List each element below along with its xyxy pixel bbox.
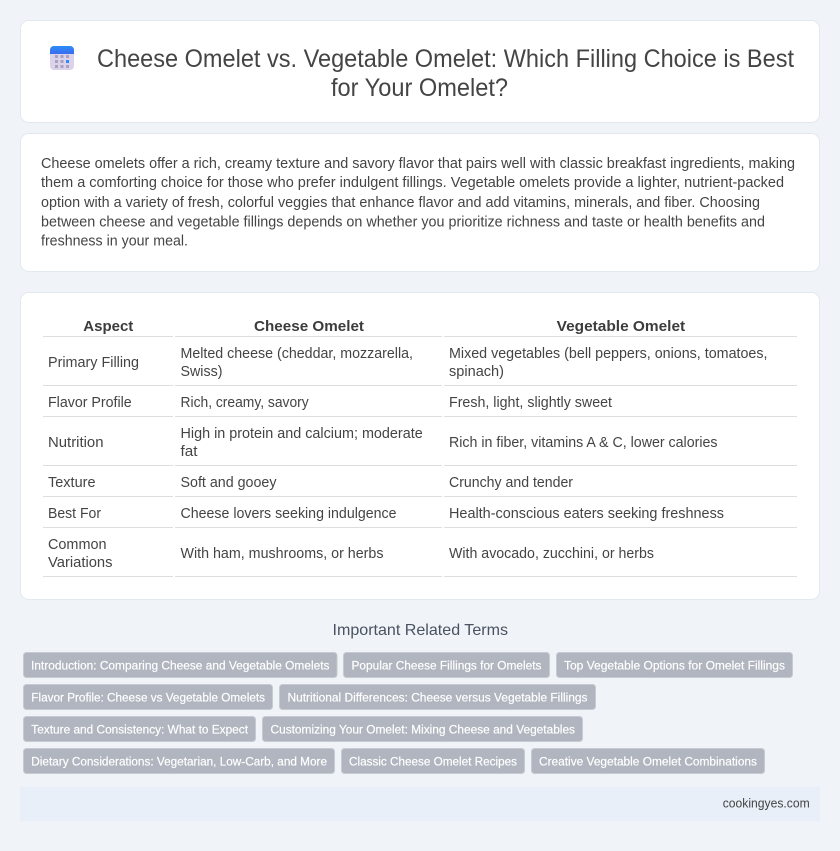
tag: Flavor Profile: Cheese vs Vegetable Omelets — [31, 690, 265, 704]
table row: flavor profile: Rich, creamy, savory — [180, 395, 309, 411]
table row: best for: Best For — [48, 506, 101, 522]
tag group: related terms — [24, 652, 792, 774]
text block: introduction paragraph: Cheese omelets offer a rich, creamy texture and savory flavor that pairs well with classic breakfast ingredients, making — [41, 156, 795, 172]
heading: important related terms: Important Related Terms — [332, 622, 508, 639]
table row: nutrition: fat — [180, 444, 198, 460]
tag — [344, 652, 550, 678]
text block: introduction paragraph: between cheese and vegetable fillings depends on whether you prioritize richness and taste or health benefits and — [41, 214, 765, 230]
table row: primary filling: Swiss) — [180, 364, 222, 380]
table header: Vegetable Omelet — [557, 319, 685, 335]
title: for Your Omelet? — [331, 75, 508, 102]
table row: common variations: Variations — [48, 555, 112, 571]
tag — [24, 748, 334, 774]
tag: Popular Cheese Fillings for Omelets — [352, 658, 542, 672]
table header — [43, 319, 797, 336]
tag — [24, 652, 337, 678]
table row: texture: Soft and gooey — [180, 475, 277, 491]
tag: Nutritional Differences: Cheese versus Vegetable Fillings — [288, 690, 588, 704]
table row: best for: Health-conscious eaters seeking freshness — [449, 506, 724, 522]
tag — [24, 716, 256, 742]
table row: flavor profile — [43, 395, 797, 416]
tag: Top Vegetable Options for Omelet Fillings — [564, 658, 785, 672]
text block: introduction paragraph — [41, 156, 795, 250]
table row: texture: Crunchy and tender — [449, 475, 573, 491]
tag — [24, 684, 272, 710]
tag — [532, 748, 764, 774]
table row: common variations: With ham, mushrooms, or herbs — [180, 546, 384, 562]
table row: flavor profile: Flavor Profile — [48, 395, 132, 411]
tag: Dietary Considerations: Vegetarian, Low-Carb, and More — [31, 754, 327, 768]
tag — [556, 652, 792, 678]
table header: Cheese Omelet — [254, 319, 364, 335]
table row: common variations: Common — [48, 537, 106, 553]
panel: comparison table — [20, 292, 820, 600]
table header: Aspect — [83, 319, 133, 335]
panel: introduction — [20, 134, 820, 272]
title: Cheese Omelet vs. Vegetable Omelet: Which Filling Choice is Best — [97, 46, 794, 73]
tag — [342, 748, 524, 774]
table row: best for: Cheese lovers seeking indulgence — [180, 506, 396, 522]
title — [97, 46, 794, 102]
tag: Classic Cheese Omelet Recipes — [349, 754, 517, 768]
table row: nutrition: High in protein and calcium; moderate — [180, 426, 423, 442]
table row: primary filling: spinach) — [449, 364, 504, 380]
footer source text: cookingyes.com — [723, 797, 810, 811]
table row: texture: Texture — [48, 475, 96, 491]
table row: nutrition — [43, 426, 797, 466]
tag: Texture and Consistency: What to Expect — [31, 722, 249, 736]
table row: nutrition: Nutrition — [48, 435, 104, 451]
tag: Creative Vegetable Omelet Combinations — [539, 754, 757, 768]
table row: common variations — [43, 537, 797, 576]
footer — [20, 787, 820, 821]
tag: Customizing Your Omelet: Mixing Cheese and Vegetables — [270, 722, 575, 736]
table row: primary filling: Mixed vegetables (bell peppers, onions, tomatoes, — [449, 346, 768, 362]
table row: common variations: With avocado, zucchini, or herbs — [449, 546, 654, 562]
table row: flavor profile: Fresh, light, slightly sweet — [449, 395, 612, 411]
tag — [262, 716, 582, 742]
table row: best for — [43, 506, 797, 528]
text block: introduction paragraph: them a comforting choice for those who prefer indulgent fillings. Vegetable omelets provide a lighter, nutrient-packed — [41, 175, 784, 191]
table row: primary filling: Melted cheese (cheddar, mozzarella, — [180, 346, 413, 362]
tag: Introduction: Comparing Cheese and Vegetable Omelets — [31, 658, 330, 672]
text block: introduction paragraph: option with a variety of fresh, colorful veggies that enhance flavor and add vitamins, minerals, and fiber. Choosing — [41, 195, 760, 211]
table row: primary filling — [43, 346, 797, 386]
text block: introduction paragraph: freshness in your meal. — [41, 234, 188, 250]
table row: nutrition: Rich in fiber, vitamins A & C, lower calories — [449, 435, 718, 451]
table row: texture — [43, 475, 797, 496]
icon: calendar — [50, 46, 74, 70]
table row: primary filling: Primary Filling — [48, 355, 139, 371]
panel: header — [20, 20, 820, 122]
tag — [280, 684, 596, 710]
